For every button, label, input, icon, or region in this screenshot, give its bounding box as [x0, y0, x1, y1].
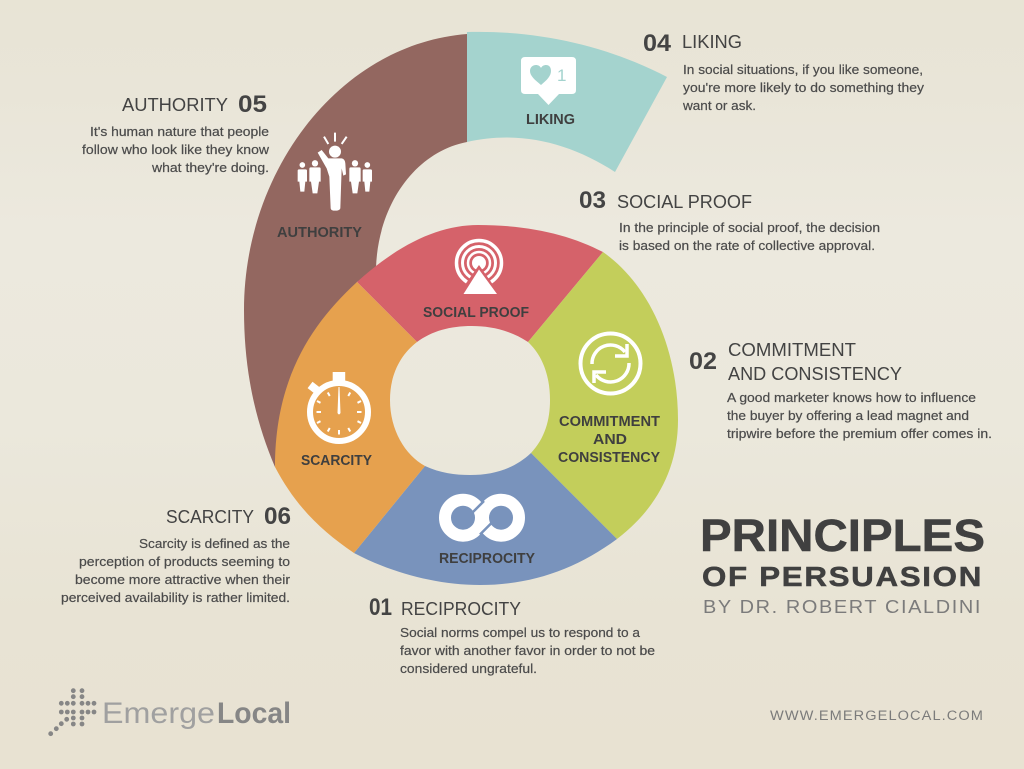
callout: 06 scarcity	[61, 503, 291, 605]
label: commitment and consistency: CONSISTENCY	[558, 450, 660, 466]
title: OF PERSUASION	[702, 561, 983, 592]
segment: liking	[467, 32, 667, 172]
segment: commitment and consistency	[528, 252, 678, 539]
icon: like speech bubble: 1	[557, 66, 566, 85]
callout: 01 reciprocity: favor with another favor in order to not be	[400, 643, 655, 658]
callout: 04 liking: In social situations, if you like someone,	[683, 62, 923, 77]
callout: 02 commitment and consistency: 02	[689, 348, 717, 375]
label: reciprocity: RECIPROCITY	[439, 551, 535, 567]
callout: 02 commitment and consistency: A good marketer knows how to influence	[727, 390, 976, 405]
icon: infinity	[445, 500, 519, 536]
callout: 05 authority: follow who look like they know	[82, 142, 270, 157]
callout: 05 authority	[82, 91, 270, 175]
segment: reciprocity	[354, 453, 617, 585]
callout: 01 reciprocity: considered ungrateful.	[400, 661, 537, 676]
callout: 04 liking: LIKING	[682, 32, 742, 52]
segment: social proof	[357, 225, 603, 342]
callout: 06 scarcity: perception of products seeming to	[79, 554, 290, 569]
icon: like speech bubble	[521, 57, 576, 105]
callout: 02 commitment and consistency	[689, 340, 992, 441]
logo: EmergeLocal: Local	[217, 697, 291, 730]
callout: 03 social proof	[579, 187, 880, 253]
title: BY DR. ROBERT CIALDINI	[703, 596, 982, 617]
segment: authority	[244, 34, 467, 467]
title: PRINCIPLES	[700, 510, 985, 561]
callout: 06 scarcity: SCARCITY	[166, 507, 254, 527]
label: social proof: SOCIAL PROOF	[423, 305, 529, 321]
callout: 06 scarcity: become more attractive when their	[75, 572, 291, 587]
callout: 06 scarcity: Scarcity is defined as the	[139, 536, 290, 551]
title	[700, 510, 985, 617]
icon: logo dots	[48, 688, 96, 736]
callout: 03 social proof: SOCIAL PROOF	[617, 192, 752, 212]
callout: 02 commitment and consistency: the buyer by offering a lead magnet and	[727, 408, 969, 423]
callout: 04 liking: you're more likely to do something they	[683, 80, 925, 95]
callout: 01 reciprocity	[369, 594, 655, 676]
callout: 04 liking	[643, 30, 925, 113]
icon: broadcast signal	[456, 240, 502, 296]
callout: 01 reciprocity: RECIPROCITY	[401, 599, 521, 619]
callout: 01 reciprocity: 01	[369, 594, 392, 621]
callout: 05 authority: 05	[238, 91, 267, 118]
icon: authority figures	[298, 133, 372, 211]
callout: 04 liking: want or ask.	[682, 98, 756, 113]
website url: WWW.EMERGELOCAL.COM	[770, 708, 984, 723]
callout: 03 social proof: In the principle of social proof, the decision	[619, 220, 880, 235]
callout: 03 social proof: is based on the rate of collective approval.	[619, 238, 875, 253]
logo: EmergeLocal	[48, 688, 291, 736]
callout: 04 liking: 04	[643, 30, 672, 57]
icon: sync arrows in circle	[580, 334, 640, 394]
label: commitment and consistency	[558, 414, 660, 466]
callout: 02 commitment and consistency: tripwire before the premium offer comes in.	[727, 426, 992, 441]
callout: 05 authority: what they're doing.	[151, 160, 269, 175]
logo: EmergeLocal: Emerge	[102, 697, 215, 730]
callout: 05 authority: It's human nature that people	[90, 124, 269, 139]
callout: 05 authority: AUTHORITY	[122, 95, 228, 115]
label: liking: LIKING	[526, 112, 575, 128]
label: authority: AUTHORITY	[277, 225, 362, 241]
callout: 01 reciprocity: Social norms compel us to respond to a	[400, 625, 641, 640]
callout: 06 scarcity: perceived availability is rather limited.	[61, 590, 290, 605]
callout: 02 commitment and consistency: AND CONSISTENCY	[728, 364, 902, 384]
label: commitment and consistency: COMMITMENT	[559, 414, 660, 430]
callout: 03 social proof: 03	[579, 187, 606, 214]
label: scarcity: SCARCITY	[301, 453, 372, 469]
label: commitment and consistency: AND	[593, 432, 627, 448]
icon: stopwatch	[308, 372, 368, 441]
callout: 06 scarcity: 06	[264, 503, 291, 530]
segment: scarcity	[275, 282, 425, 553]
callout: 02 commitment and consistency: COMMITMENT	[728, 340, 856, 360]
